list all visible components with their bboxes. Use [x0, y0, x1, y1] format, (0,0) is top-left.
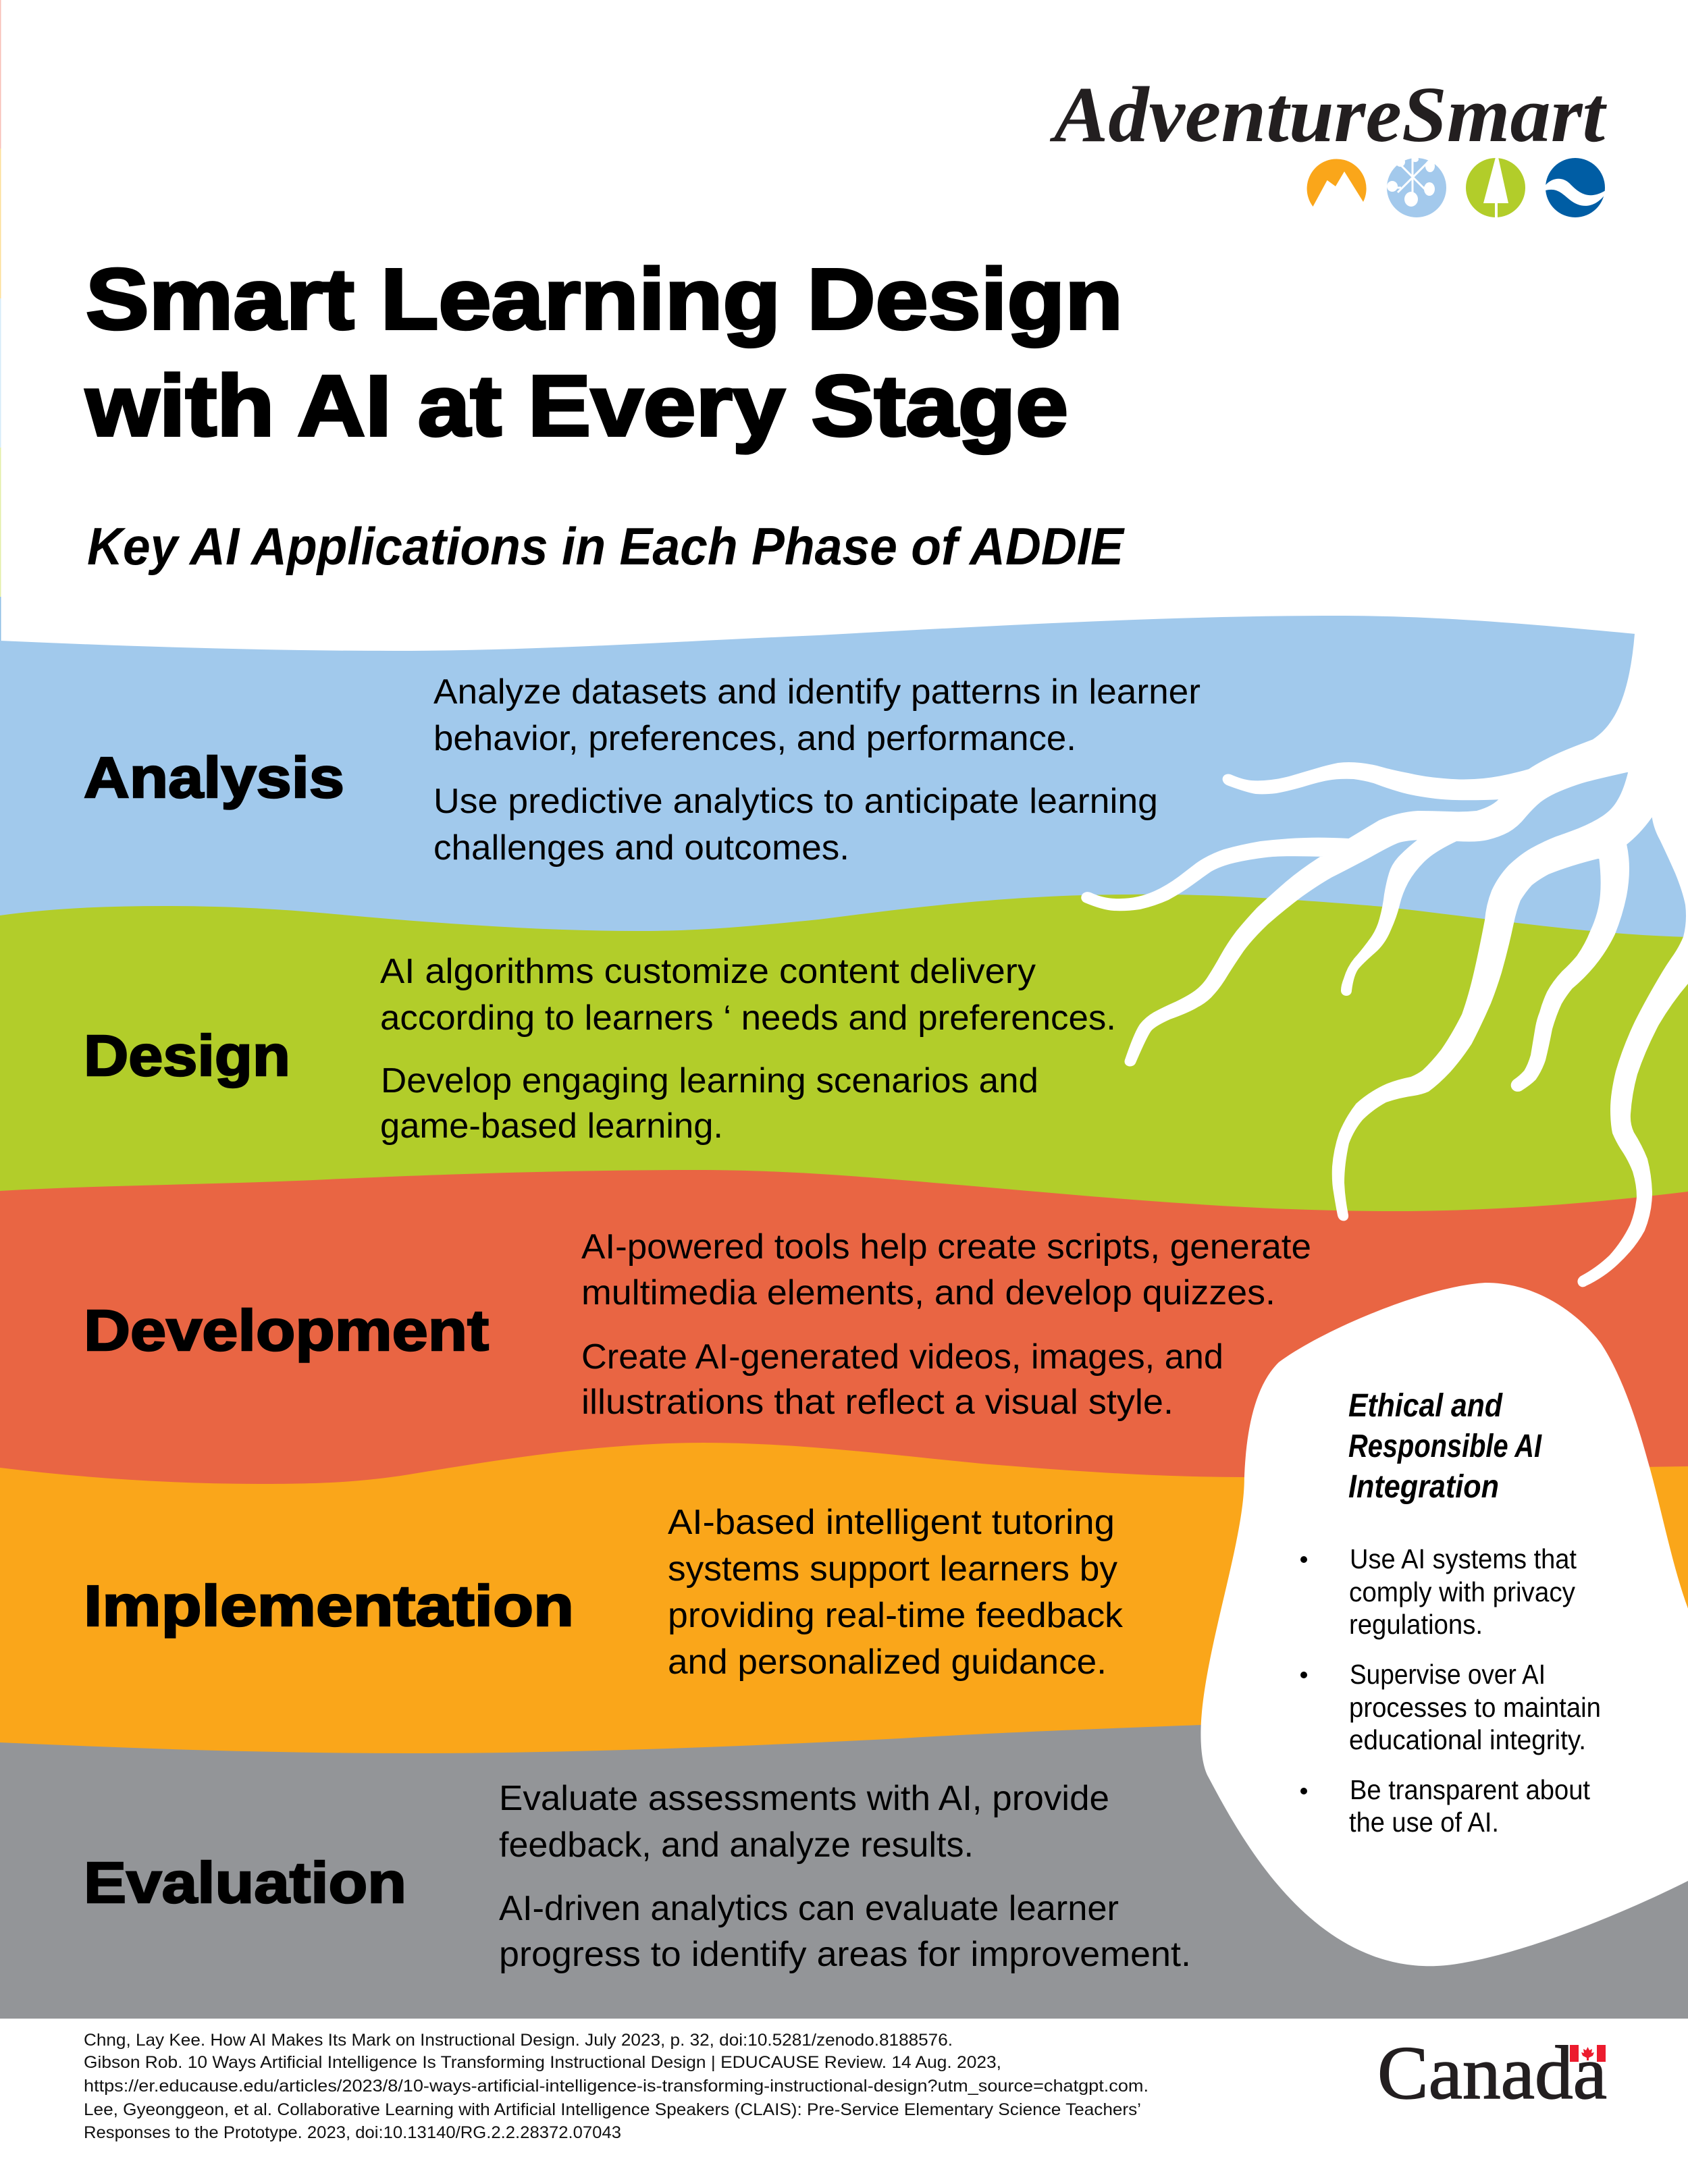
references: Chng, Lay Kee. How AI Makes Its Mark on Instructional Design. July 2023, p. 32, doi:10.5281/zenodo.8188576. — [84, 2031, 953, 2050]
text block: Design description: game-based learning. — [380, 1107, 723, 1146]
text block: Development description: Create AI-generated videos, images, and — [581, 1337, 1223, 1377]
panel heading: Responsible AI — [1348, 1429, 1542, 1464]
band: implementation (orange) — [0, 1443, 1688, 2019]
bullet: supervise: processes to maintain — [1349, 1692, 1601, 1723]
bullet: supervise — [1300, 1659, 1601, 1755]
panel heading: Ethical and — [1348, 1388, 1503, 1424]
illustration: white tree roots — [1082, 594, 1688, 1285]
text block: Evaluation description: Evaluate assessments with AI, provide — [499, 1779, 1109, 1818]
text block: Design description — [380, 952, 1116, 1146]
logo: Canada wordmark: Canada — [1377, 2031, 1607, 2115]
references: Responses to the Prototype. 2023, doi:10.13140/RG.2.2.28372.07043 — [84, 2123, 621, 2142]
heading: Design: Design — [84, 1024, 290, 1088]
icon: tree — [1466, 157, 1525, 218]
text block: Implementation description — [668, 1503, 1124, 1682]
title: Smart Learning Design — [86, 251, 1123, 348]
subtitle: Key AI Applications in Each Phase of ADDIE — [87, 516, 1125, 576]
text block: Evaluation description: AI-driven analytics can evaluate learner — [499, 1889, 1119, 1928]
panel: ethical and responsible AI — [1201, 1283, 1688, 1966]
text block: Development description — [581, 1227, 1311, 1422]
band: design (green) — [0, 895, 1688, 2019]
section: Design — [84, 952, 1116, 1146]
section: Development — [84, 1227, 1311, 1422]
text block: Implementation description: AI-based intelligent tutoring — [668, 1503, 1115, 1542]
text block: Analysis description: behavior, preferences, and performance. — [433, 719, 1076, 758]
bullet: supervise: educational integrity. — [1349, 1724, 1586, 1755]
bullet: privacy — [1300, 1543, 1577, 1640]
heading: Implementation: Implementation — [84, 1574, 574, 1639]
text block: Analysis description: Use predictive analytics to anticipate learning — [433, 782, 1158, 821]
icon: Canadian flag — [1570, 2045, 1606, 2062]
bullet: privacy: Use AI systems that — [1350, 1543, 1577, 1574]
text block: Development description: illustrations that reflect a visual style. — [581, 1383, 1173, 1422]
panel background blob — [1201, 1283, 1688, 1966]
heading: Analysis: Analysis — [84, 746, 344, 810]
text block: Implementation description: systems support learners by — [668, 1549, 1117, 1589]
references: Lee, Gyeonggeon, et al. Collaborative Learning with Artificial Intelligence Speakers (CLAIS): Pre-Service Elementary Science Teachers’ — [84, 2100, 1141, 2119]
title: with AI at Every Stage — [85, 358, 1068, 454]
wordmark: AdventureSmart — [1049, 70, 1607, 159]
panel heading — [1348, 1388, 1542, 1505]
bullet: transparency: Be transparent about — [1350, 1774, 1591, 1805]
heading: Development: Development — [84, 1299, 489, 1363]
text block: Design description: Develop engaging learning scenarios and — [381, 1061, 1038, 1100]
section: Evaluation — [84, 1779, 1191, 1974]
bullet: privacy: comply with privacy — [1349, 1576, 1575, 1607]
text block: Development description: multimedia elements, and develop quizzes. — [581, 1273, 1275, 1312]
logo: AdventureSmart — [1049, 70, 1607, 218]
text block: Analysis description: Analyze datasets and identify patterns in learner — [433, 672, 1201, 712]
references: https://er.educause.edu/articles/2023/8/10-ways-artificial-intelligence-is-transforming-instructional-design?utm_source=chatgpt.com. — [84, 2077, 1149, 2096]
section: Implementation — [84, 1503, 1124, 1682]
band: evaluation (grey) — [0, 1715, 1688, 2019]
bullet: supervise: Supervise over AI — [1350, 1659, 1546, 1690]
section: Analysis — [84, 672, 1201, 868]
text block: Development description: AI-powered tools help create scripts, generate — [581, 1227, 1311, 1267]
text block: Evaluation description: feedback, and analyze results. — [499, 1826, 974, 1865]
icon: snowflake — [1387, 157, 1446, 217]
band: development (red) — [0, 1170, 1688, 2019]
text block: Analysis description: challenges and outcomes. — [433, 828, 849, 868]
text block: Analysis description — [433, 672, 1201, 868]
bullet: transparency — [1300, 1774, 1591, 1838]
bullet: privacy: regulations. — [1349, 1609, 1483, 1640]
references — [84, 2031, 1149, 2142]
icon: mountain — [1307, 159, 1367, 207]
text block: Implementation description: and personalized guidance. — [668, 1643, 1107, 1682]
heading: Evaluation: Evaluation — [84, 1851, 406, 1915]
text block: Evaluation description: progress to identify areas for improvement. — [499, 1935, 1191, 1974]
text block: Implementation description: providing real-time feedback — [668, 1596, 1124, 1635]
text block: Design description: AI algorithms customize content delivery — [380, 952, 1036, 991]
icon: water — [1546, 158, 1606, 217]
band: analysis (blue) — [0, 616, 1688, 2019]
text block: Evaluation description — [499, 1779, 1191, 1974]
references: Gibson Rob. 10 Ways Artificial Intelligence Is Transforming Instructional Design | EDUCAUSE Review. 14 Aug. 2023, — [84, 2053, 1001, 2072]
title — [85, 251, 1123, 454]
bullet: transparency: the use of AI. — [1349, 1807, 1499, 1838]
panel heading: Integration — [1348, 1469, 1499, 1505]
text block: Design description: according to learners ‘ needs and preferences. — [380, 998, 1116, 1038]
